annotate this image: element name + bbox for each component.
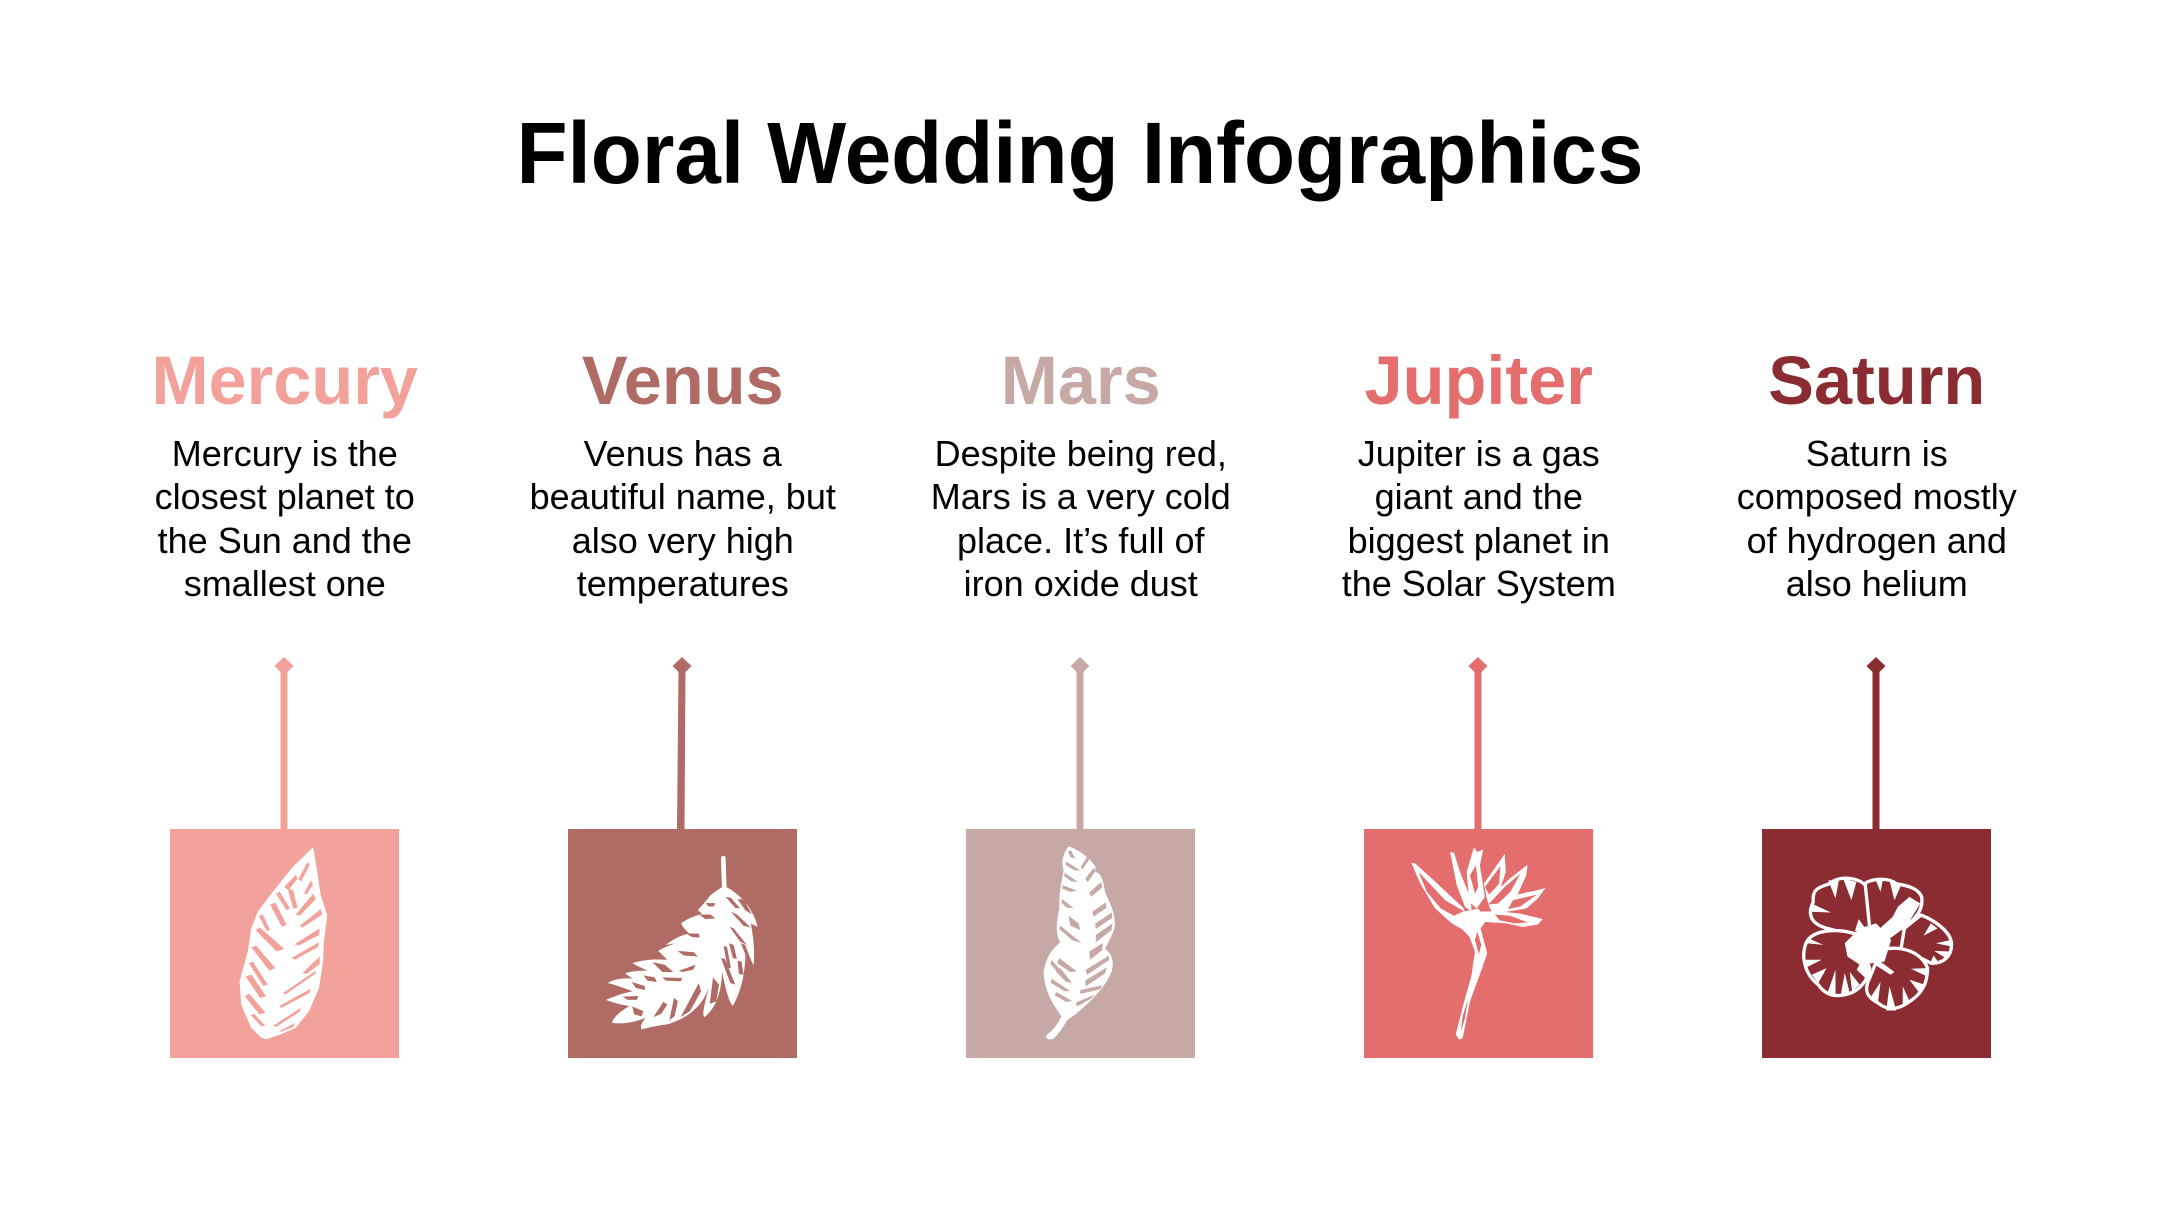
text: Venus description: beautiful name, but [530, 476, 836, 517]
text: Mercury description: Mercury is the [172, 433, 398, 474]
text: Mercury description: smallest one [184, 563, 386, 604]
title: Floral Wedding Infographics [516, 104, 1644, 202]
text: Venus description: Venus has a [584, 433, 782, 474]
tile: Venus [568, 829, 796, 1058]
arrow: Mars connector [1070, 657, 1090, 829]
tile: Mars [966, 829, 1194, 1058]
tile: Jupiter [1364, 829, 1592, 1058]
panel: Jupiter [1342, 342, 1616, 1058]
arrow: Venus connector [672, 657, 692, 829]
text: Jupiter description: giant and the [1375, 476, 1583, 517]
icon: bird of paradise flower [1411, 847, 1546, 1040]
panel: Saturn [1737, 342, 2017, 1058]
text: Jupiter description: Jupiter is a gas [1358, 433, 1600, 474]
text: Mars description: Despite being red, [935, 433, 1227, 474]
text: Saturn description: composed mostly [1737, 476, 2017, 517]
panel: Venus [530, 342, 836, 1058]
icon: long leaf [1044, 846, 1115, 1040]
heading: Saturn: Saturn [1768, 342, 1985, 419]
text: Mars description: iron oxide dust [964, 563, 1198, 604]
arrow: Saturn connector [1866, 657, 1886, 829]
text: Mars description: place. It’s full of [957, 520, 1204, 560]
text: Mercury description: closest planet to [155, 476, 415, 517]
tile: Saturn [1762, 829, 1990, 1058]
text: Mars description [931, 433, 1231, 604]
text: Saturn description: also helium [1786, 563, 1968, 604]
text: Jupiter description: biggest planet in [1348, 520, 1610, 560]
text: Saturn description: of hydrogen and [1747, 520, 2007, 560]
text: Jupiter description: the Solar System [1342, 563, 1616, 604]
icon: feather leaf [606, 856, 758, 1030]
heading: Jupiter: Jupiter [1365, 342, 1593, 419]
panel: Mars [931, 342, 1231, 1058]
tile: Mercury [170, 829, 398, 1058]
heading: Mercury: Mercury [151, 342, 418, 419]
panel: Mercury [151, 342, 418, 1058]
text: Mercury description: the Sun and the [158, 520, 412, 560]
heading: Mars: Mars [1001, 342, 1161, 419]
text: Jupiter description [1342, 433, 1616, 604]
text: Venus description [530, 433, 836, 604]
heading: Venus: Venus [582, 342, 784, 419]
text: Venus description: also very high [572, 520, 794, 560]
text: Saturn description: Saturn is [1806, 433, 1948, 474]
arrow: Mercury connector [274, 657, 294, 829]
text: Mercury description [155, 433, 415, 604]
arrow: Jupiter connector [1468, 657, 1488, 829]
text: Venus description: temperatures [577, 563, 789, 604]
icon: leaf [240, 848, 328, 1040]
text: Saturn description [1737, 433, 2017, 604]
icon: pansy flower [1802, 876, 1954, 1010]
text: Mars description: Mars is a very cold [931, 476, 1231, 517]
